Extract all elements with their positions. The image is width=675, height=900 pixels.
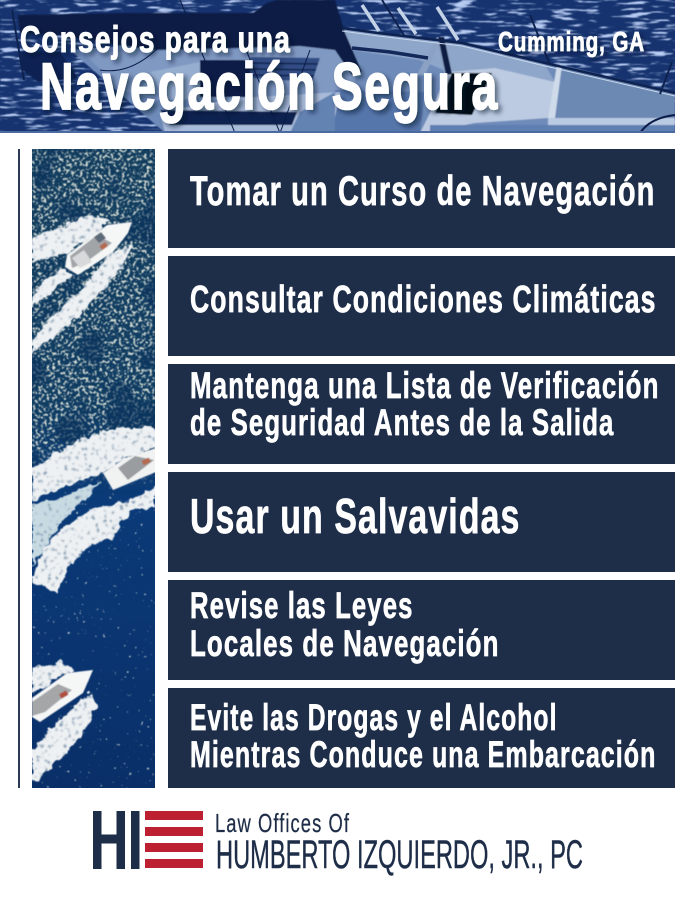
panel 5: Revise las Leyes [190,585,414,626]
left vertical rule [18,149,20,788]
wakes [32,215,155,780]
panel 4: Usar un Salvavidas [190,490,520,544]
firm name small: Law Offices Of [215,808,350,838]
photo strip: boats from above [32,149,156,788]
panel 5 [168,580,675,680]
boat 3 [32,670,93,722]
panel 6 [168,688,675,788]
header photo: sailboat deck on water [0,0,675,133]
panel 3 [168,364,675,464]
boat 2 [103,448,156,490]
panel 5: Locales de Navegación [190,623,500,664]
panel 4 [168,472,675,572]
header banner [0,0,675,133]
panel 1 [168,149,675,248]
logo [93,808,583,877]
panel 2 [168,256,675,356]
boat 1 [65,222,132,275]
title line 1: Consejos para una [20,19,291,60]
logo mark: HI with red stripes [93,811,203,869]
